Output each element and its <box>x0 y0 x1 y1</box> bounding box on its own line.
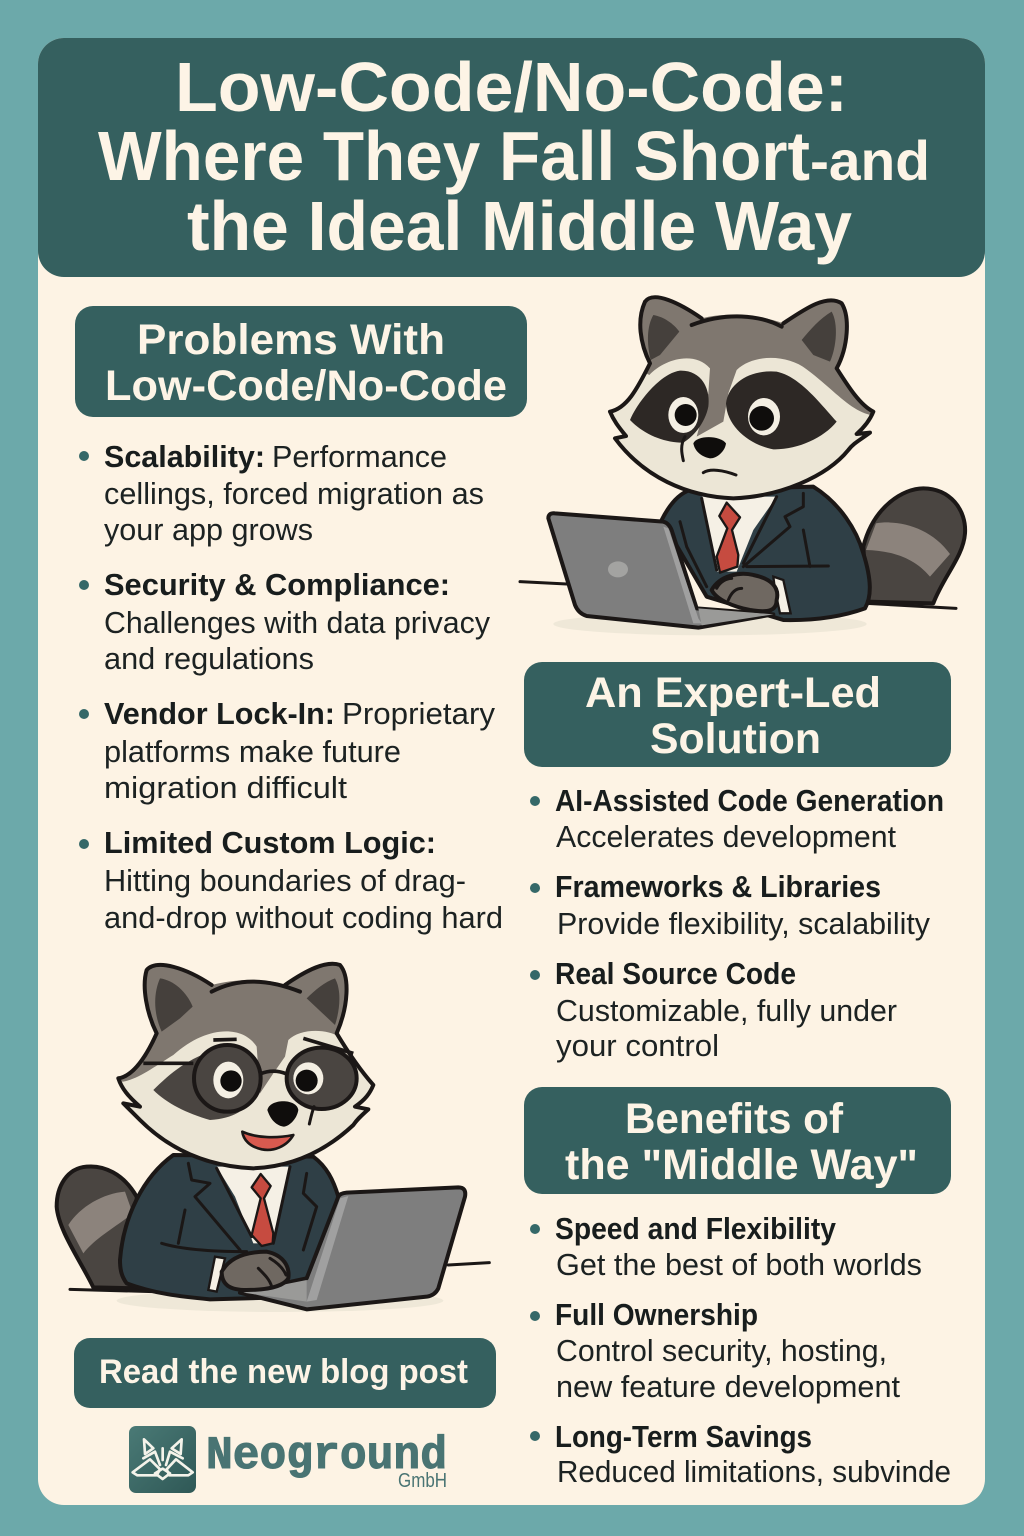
benefit: speed: Get the best of both worlds <box>556 1247 922 1282</box>
logo: Neoground GmbH <box>129 1426 447 1493</box>
desk line <box>520 582 956 608</box>
nose <box>267 1101 298 1127</box>
problem: scalability: your app grows <box>104 512 313 547</box>
title banner <box>38 38 985 277</box>
solution: source code: your control <box>556 1028 719 1063</box>
mouth <box>242 1132 293 1150</box>
problem: vendor lock-in <box>79 696 496 805</box>
tail <box>57 1166 140 1288</box>
nose and mouth <box>682 437 736 475</box>
head <box>610 280 887 498</box>
problems list <box>79 439 503 935</box>
solution: frameworks: Provide flexibility, scalability <box>557 906 930 941</box>
heading: problems <box>75 306 527 417</box>
problem: scalability: Performance <box>272 439 447 474</box>
benefits list <box>530 1211 951 1489</box>
benefit: speed: Speed and Flexibility <box>555 1211 837 1246</box>
problem: vendor lock-in: migration difficult <box>104 770 347 805</box>
company suffix: GmbH <box>398 1470 447 1492</box>
title banner: -and <box>810 129 930 192</box>
tail <box>863 488 965 603</box>
problem: custom logic: Limited Custom Logic: <box>104 825 436 860</box>
illustration: happy raccoon with glasses and laptop <box>57 950 489 1312</box>
glasses <box>143 1038 357 1112</box>
desk line <box>70 1263 489 1293</box>
title banner: Where They Fall Short <box>98 117 810 195</box>
problem: scalability <box>79 439 484 547</box>
suit <box>662 487 870 620</box>
title banner: Low-Code/No-Code: <box>175 48 848 126</box>
solution list <box>530 783 944 1063</box>
heading: benefits: Benefits of <box>625 1095 844 1143</box>
heading: expert-led solution <box>524 662 951 767</box>
benefit: speed <box>530 1211 922 1282</box>
heading: problems: Problems With <box>137 316 445 364</box>
heading: benefits: the "Middle Way" <box>565 1141 918 1189</box>
eyes <box>668 397 780 435</box>
problem: custom logic: Hitting boundaries of drag- <box>104 863 466 898</box>
hand <box>222 1252 289 1290</box>
solution: frameworks <box>530 869 930 941</box>
heading: benefits <box>524 1087 951 1194</box>
shadow <box>117 1289 443 1312</box>
shadow <box>553 613 867 635</box>
problem: security <box>79 567 490 676</box>
benefit: ownership: Control security, hosting, <box>556 1333 887 1368</box>
logo icon <box>129 1426 196 1493</box>
suit <box>120 1155 338 1299</box>
solution: source code: Customizable, fully under <box>556 993 897 1028</box>
benefit: savings <box>530 1419 951 1489</box>
problem: vendor lock-in: Vendor Lock-In: <box>104 696 335 731</box>
solution: frameworks: Frameworks & Libraries <box>555 869 881 904</box>
problem: scalability: cellings, forced migration as <box>104 476 484 511</box>
problem: custom logic <box>79 825 503 935</box>
title banner: the Ideal Middle Way <box>187 187 852 265</box>
laptop <box>240 1187 465 1309</box>
illustration: worried raccoon with laptop <box>520 280 965 635</box>
problem: security: Security & Compliance: <box>104 567 450 602</box>
wordmark: Neoground <box>206 1430 447 1482</box>
heading: problems: Low-Code/No-Code <box>105 362 507 410</box>
problem: custom logic: and-drop without coding hard <box>104 900 503 935</box>
call-to-action button: Read the new blog post <box>99 1353 468 1391</box>
problem: security: and regulations <box>104 641 314 676</box>
problem: security: Challenges with data privacy <box>104 605 490 640</box>
benefit: savings: Long-Term Savings <box>555 1419 812 1454</box>
benefit: ownership: new feature development <box>556 1369 900 1404</box>
call-to-action button <box>74 1338 496 1408</box>
hand <box>712 574 777 611</box>
problem: vendor lock-in: platforms make future <box>104 734 401 769</box>
problem: vendor lock-in: Proprietary <box>342 696 496 731</box>
heading: expert-led solution: An Expert-Led <box>585 669 881 717</box>
benefit: ownership: Full Ownership <box>555 1297 758 1332</box>
benefit: savings: Reduced limitations, subvinde <box>557 1454 951 1489</box>
solution: AI-assisted: Accelerates development <box>556 819 896 854</box>
heading: expert-led solution: Solution <box>650 715 821 763</box>
solution: AI-assisted <box>530 783 944 854</box>
solution: source code: Real Source Code <box>555 956 796 991</box>
problem: scalability: Scalability: <box>104 439 265 474</box>
solution: AI-assisted: AI-Assisted Code Generation <box>555 783 944 818</box>
solution: source code <box>530 956 897 1063</box>
head <box>107 950 373 1168</box>
benefit: ownership <box>530 1297 900 1404</box>
eyes <box>213 1062 323 1098</box>
laptop <box>548 513 773 628</box>
